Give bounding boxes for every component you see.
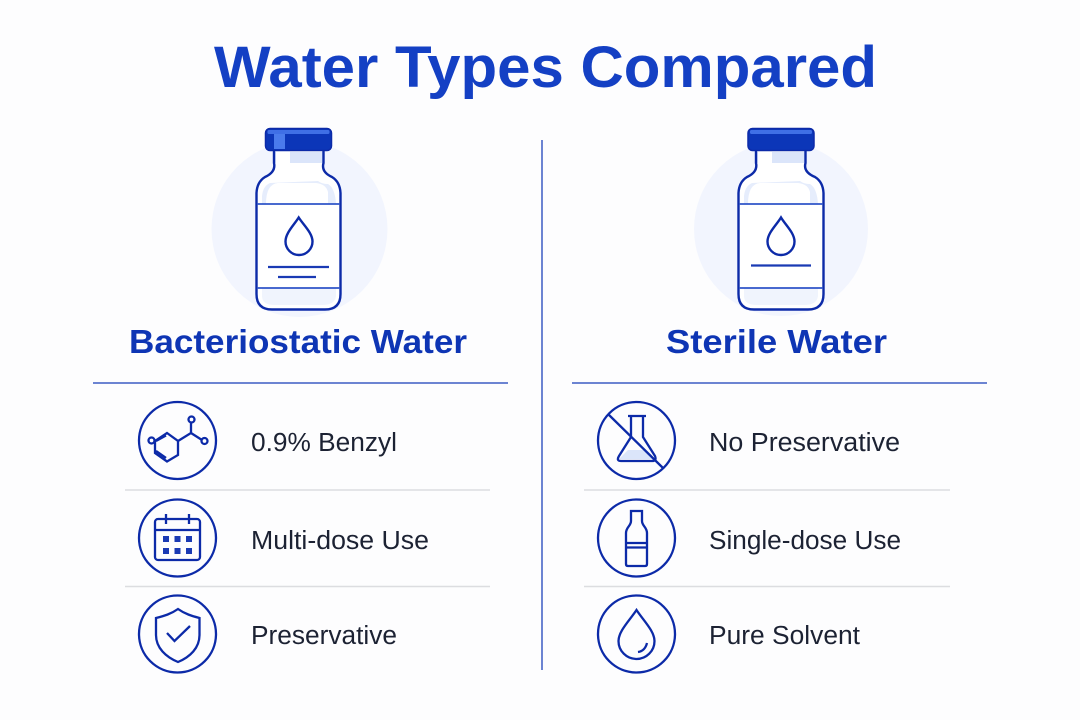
row: multi-dose use	[139, 500, 429, 576]
icon: crossed-out flask	[598, 402, 675, 479]
row: preservative: Preservative	[251, 622, 397, 650]
icon: small bottle	[598, 500, 675, 576]
row: no preservative	[598, 402, 900, 479]
row: 0.9% benzyl	[139, 402, 397, 479]
vial cap	[748, 128, 814, 150]
illustration: sterile vial	[694, 128, 868, 316]
title: Water Types Compared	[214, 35, 877, 100]
row: single-dose use	[598, 500, 901, 576]
row: single-dose use: Single-dose Use	[709, 527, 901, 555]
icon: calendar	[139, 500, 216, 576]
row: no preservative: No Preservative	[709, 429, 900, 457]
row: pure solvent: Pure Solvent	[709, 622, 860, 650]
row: 0.9% benzyl: 0.9% Benzyl	[251, 429, 397, 457]
icon: shield check	[139, 596, 216, 672]
vial cap	[266, 128, 332, 150]
icon: water drop	[598, 596, 675, 672]
center divider	[541, 140, 543, 670]
panel: sterile water	[572, 128, 987, 672]
heading: sterile water: Sterile Water	[666, 323, 887, 360]
icon: water drop on label	[286, 218, 312, 255]
icon: molecule	[139, 402, 216, 479]
row: pure solvent	[598, 596, 860, 672]
illustration: bacteriostatic vial	[212, 128, 388, 317]
row: preservative	[139, 596, 397, 672]
heading: bacteriostatic water: Bacteriostatic Water	[129, 323, 467, 360]
panel: bacteriostatic water	[93, 128, 508, 672]
icon: water drop on label	[768, 218, 794, 255]
row: multi-dose use: Multi-dose Use	[251, 527, 429, 555]
